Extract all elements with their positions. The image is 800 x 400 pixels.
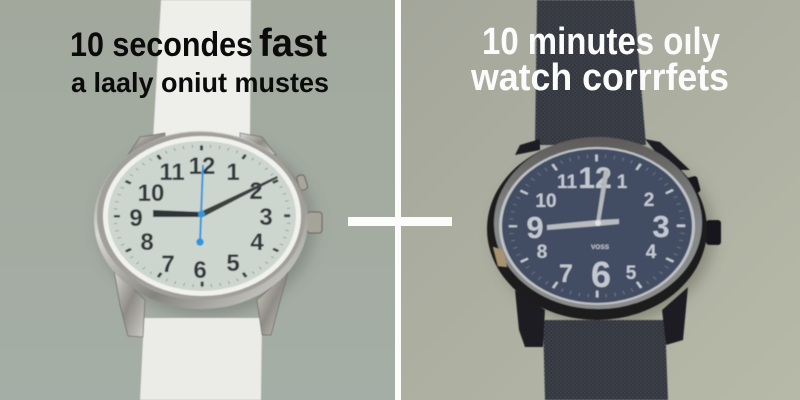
- hour hand: [547, 219, 619, 230]
- dial numerals: 5: [226, 250, 240, 277]
- dial numerals: 9: [129, 205, 143, 232]
- heading: right: [470, 21, 729, 99]
- strap: black top: [535, 0, 646, 145]
- dial numerals: 7: [161, 251, 175, 278]
- center pin: [595, 220, 601, 226]
- strap: white bottom: [140, 318, 262, 400]
- dial numerals: 8: [537, 242, 547, 263]
- minute hand: [596, 170, 609, 223]
- dial numerals: VOSS: [591, 244, 610, 251]
- crown and pusher: [296, 174, 322, 233]
- dial numerals: 1: [226, 159, 240, 186]
- dial numerals: [526, 162, 670, 295]
- divider: vertical line: [395, 0, 401, 400]
- lugs: silver: [114, 133, 288, 337]
- reflection: [493, 247, 507, 267]
- strap: white top: [153, 0, 251, 140]
- heading: left: [70, 22, 329, 98]
- hour hand: [153, 210, 201, 217]
- dial numerals: 4: [250, 229, 264, 256]
- dial numerals: 11: [159, 159, 185, 186]
- lugs: black: [515, 139, 690, 347]
- heading: right: watch corrrfets: [470, 57, 729, 99]
- heading: left: 10 secondes: [70, 26, 253, 64]
- crown and pusher: [684, 175, 721, 245]
- heading: right: 10 minutes oıly: [482, 21, 720, 63]
- dial numerals: 5: [626, 263, 637, 284]
- heading: left: a laaly oniut mustes: [71, 67, 329, 98]
- divider: horizontal line: [348, 217, 452, 226]
- second hand: blue: [196, 165, 205, 246]
- dial numerals: 4: [646, 242, 657, 263]
- dial numerals: 2: [249, 178, 263, 205]
- dial: navy face: [502, 149, 692, 303]
- dial ticks: [115, 146, 289, 286]
- shadow: [494, 142, 714, 326]
- dial numerals: 12: [578, 162, 612, 195]
- dial numerals: 3: [259, 204, 273, 231]
- dial numerals: 6: [591, 254, 611, 295]
- case: black: [487, 137, 707, 320]
- heading: left: fast: [259, 22, 327, 65]
- dial numerals: 10: [138, 180, 164, 207]
- panel: right background: [396, 0, 800, 400]
- dial ticks: [511, 156, 683, 296]
- strap: black bottom: [543, 320, 668, 400]
- dial numerals: 11: [557, 172, 577, 193]
- case: silver bezel: [94, 131, 308, 309]
- dial numerals: 7: [559, 260, 573, 288]
- panel: left background: [0, 0, 396, 400]
- dial numerals: 1: [617, 172, 628, 193]
- dial numerals: 12: [189, 153, 215, 180]
- dial numerals: 6: [193, 257, 207, 284]
- dial numerals: 9: [526, 210, 544, 245]
- dial numerals: 10: [535, 191, 557, 212]
- dial: pale face: [108, 141, 296, 291]
- dial numerals: 8: [140, 229, 154, 256]
- watch: black strap dark watch: [487, 0, 721, 400]
- watch: white strap silver watch: [94, 0, 322, 400]
- dial numerals: 2: [644, 190, 654, 211]
- dial numerals: [129, 153, 273, 284]
- shadow: [99, 136, 315, 316]
- minute hand: [200, 176, 278, 217]
- dial numerals: 3: [652, 209, 670, 244]
